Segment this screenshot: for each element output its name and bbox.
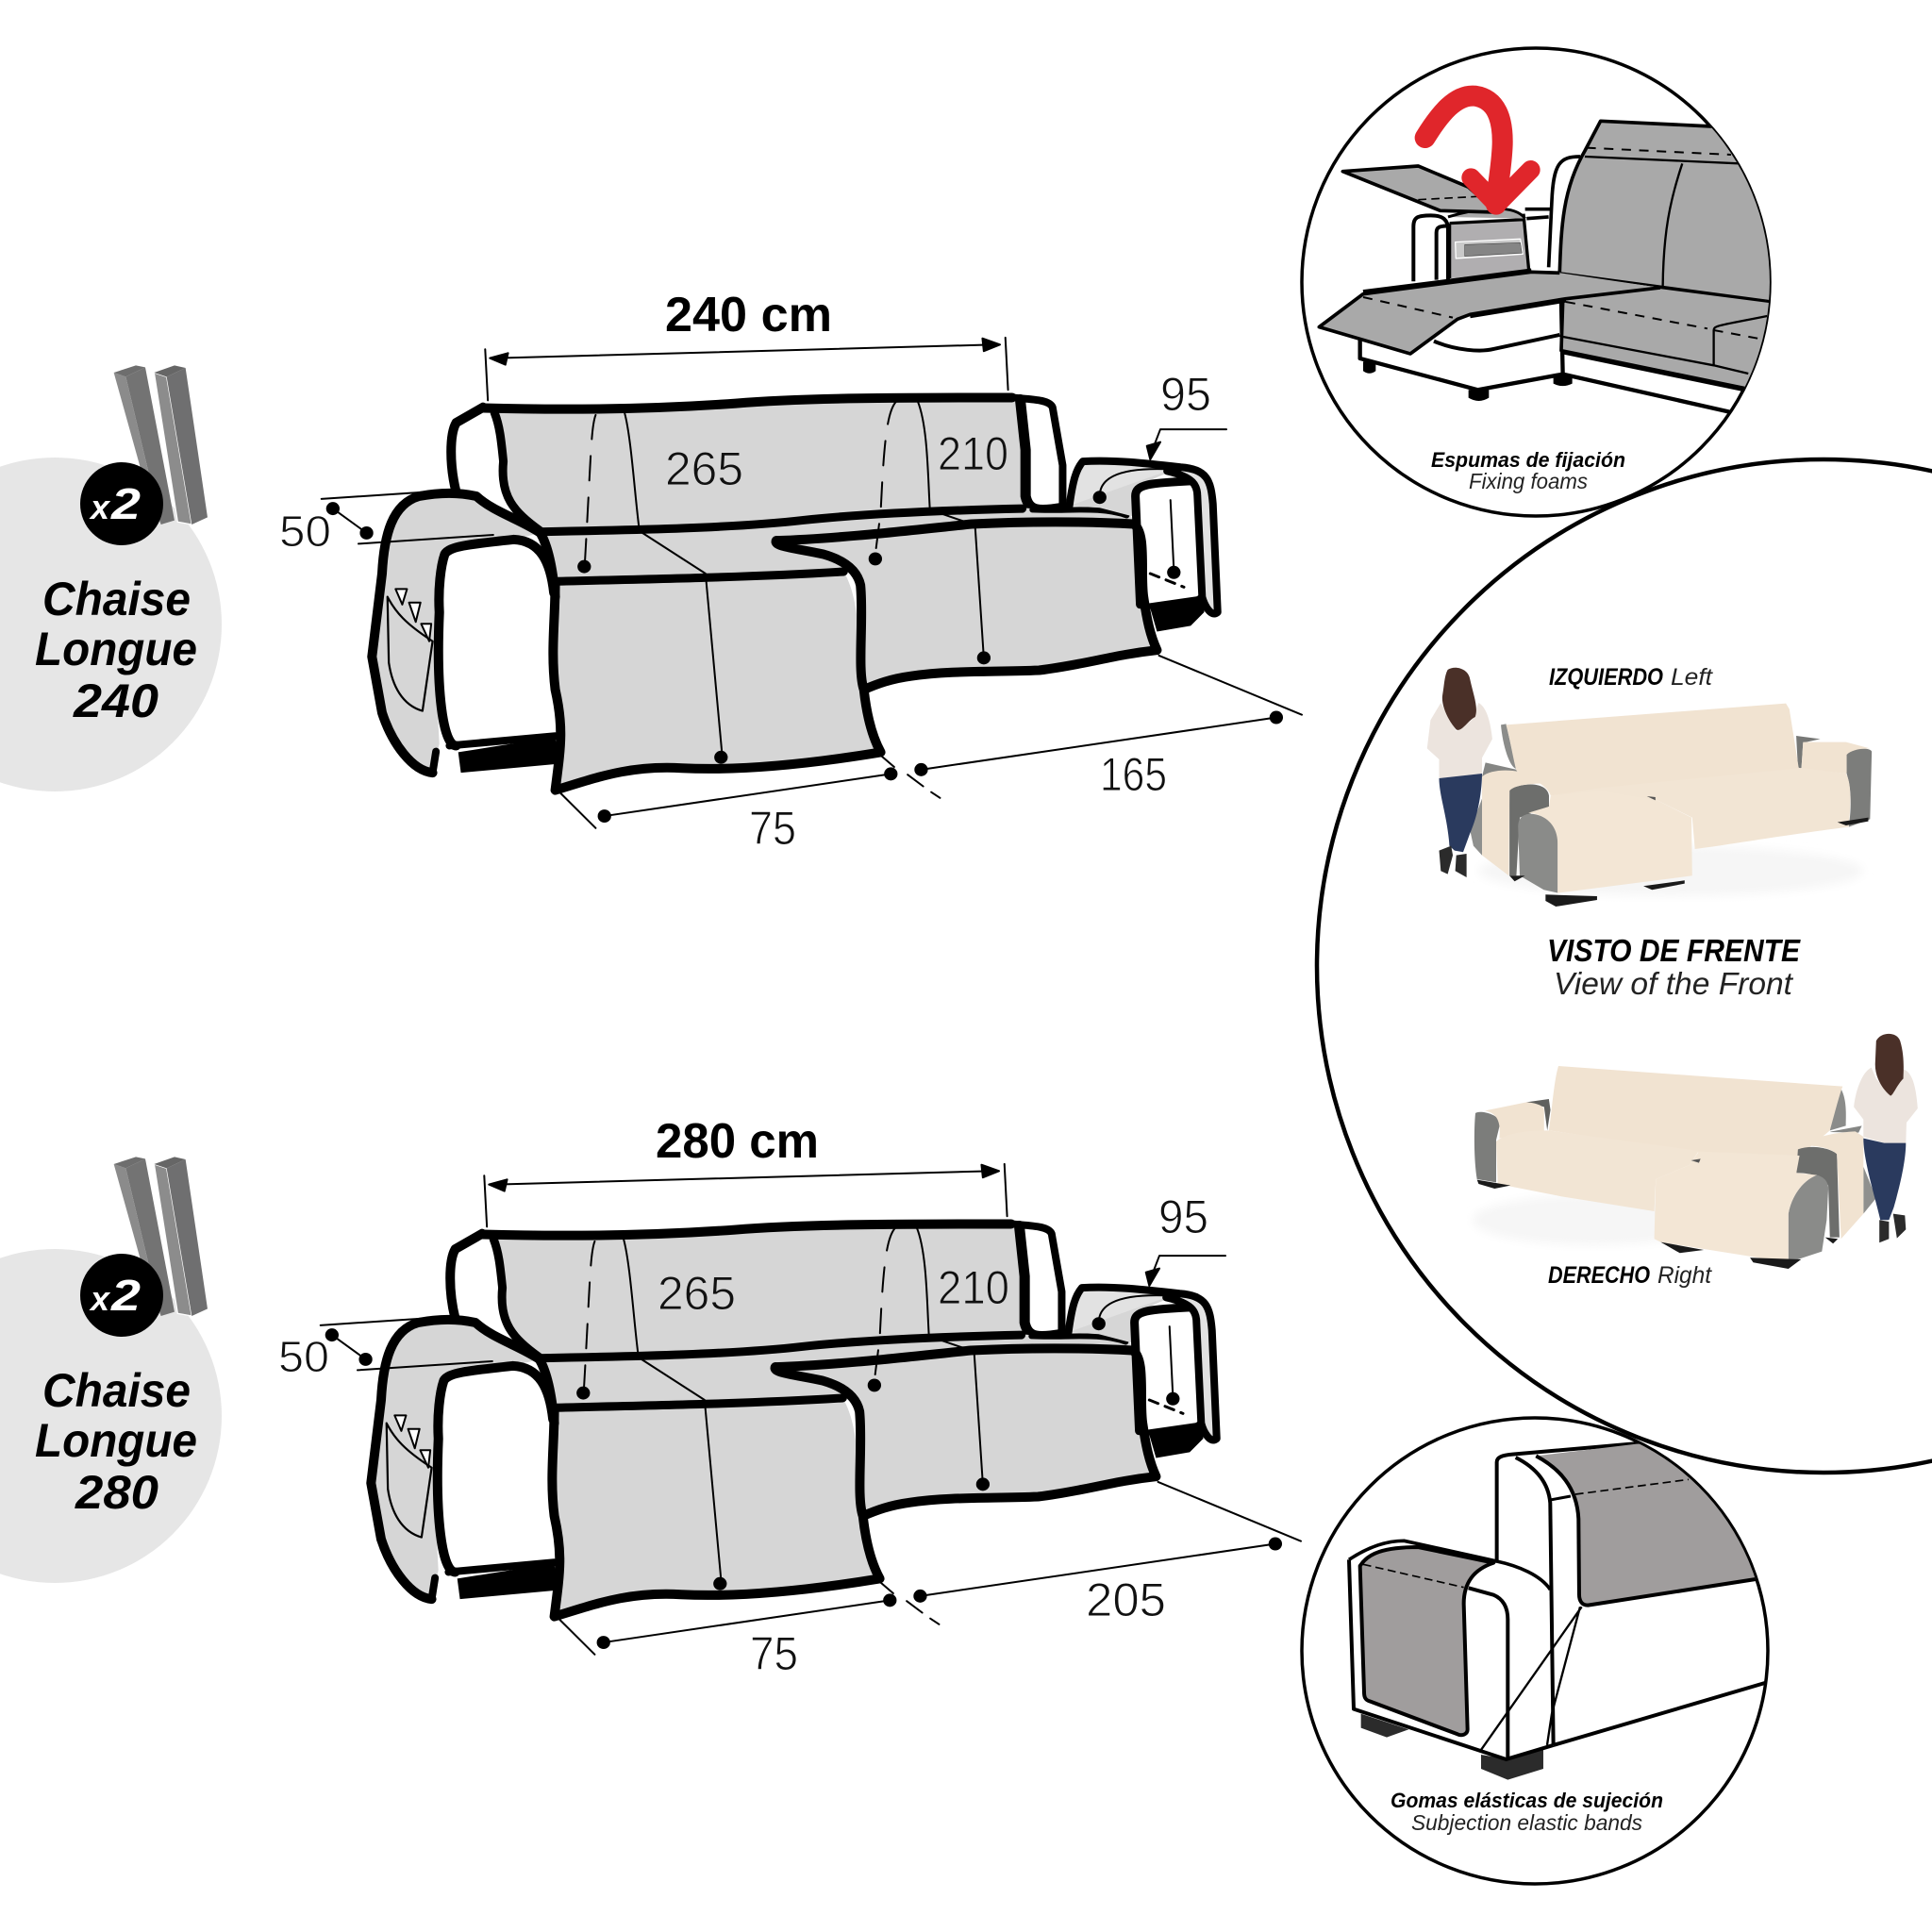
measurements: sofa 280: 265 xyxy=(658,1267,736,1320)
measurements: sofa 280: 280 cm xyxy=(656,1114,819,1169)
measurements: sofa 240: 240 cm xyxy=(665,288,832,342)
photo: right chaise sofa with woman xyxy=(1473,1034,1918,1269)
caption: fixing foams: Fixing foams xyxy=(1469,469,1588,493)
illustration: foam insertion xyxy=(1319,121,1795,412)
back cushion cover xyxy=(451,397,1062,531)
icon: x2 quantity: x xyxy=(89,1279,111,1318)
grey disc xyxy=(0,458,222,791)
measurements: sofa 240: 165 xyxy=(1100,748,1167,801)
panel: view of the front circle xyxy=(1317,459,1932,1473)
measurements: sofa 240: 95 xyxy=(1160,368,1211,421)
left armrest cover with pocket xyxy=(372,493,556,773)
heading: Chaise Longue 240: 240 xyxy=(73,675,158,727)
heading: Chaise Longue 280: 280 xyxy=(75,1466,158,1519)
icon: x2 quantity xyxy=(80,462,163,545)
arrow: red insertion arrow xyxy=(1425,96,1531,205)
icon: x2 quantity xyxy=(80,1254,163,1337)
grey disc xyxy=(0,1249,222,1583)
label: right: Right xyxy=(1657,1262,1712,1289)
icon: foam bars xyxy=(114,1157,208,1316)
right seat cover xyxy=(776,509,1157,690)
photo: left chaise sofa with woman xyxy=(1427,668,1872,907)
heading: view of the front: View of the Front xyxy=(1554,966,1794,1001)
dark plinth bars xyxy=(458,591,1204,773)
diagram: sofa cover 240 xyxy=(322,338,1302,828)
icon: x2 quantity: 2 xyxy=(110,1271,141,1320)
measurements: sofa 240: 210 xyxy=(938,427,1008,480)
panel: chaise longue 280 badge xyxy=(0,1157,222,1583)
heading: view of the front: VISTO DE FRENTE xyxy=(1547,933,1801,968)
measurement lines xyxy=(322,338,1302,828)
panel: chaise longue 240 badge xyxy=(0,365,222,791)
heading: Chaise Longue 240: Longue xyxy=(35,623,197,675)
label: left: Left xyxy=(1671,664,1713,691)
measurements: sofa 280: 75 xyxy=(750,1627,798,1680)
caption: elastic bands xyxy=(1391,1789,1663,1835)
measurements: sofa 280 xyxy=(278,1114,1208,1680)
heading: view of the front xyxy=(1547,933,1801,1001)
measurements: sofa 240: 265 xyxy=(665,442,743,495)
caption: elastic bands: Subjection elastic bands xyxy=(1411,1810,1642,1835)
measurements: sofa 240: 75 xyxy=(749,802,796,855)
diagram: sofa cover 280 xyxy=(321,1164,1301,1655)
icon: foam bars xyxy=(114,365,208,525)
panel: elastic bands detail xyxy=(1302,1418,1795,1884)
measurements: sofa 280: 205 xyxy=(1086,1574,1166,1626)
illustration: armrest with elastic bands xyxy=(1349,1443,1795,1780)
panel: fixing foams detail xyxy=(1302,48,1795,516)
measurement dots xyxy=(326,491,1283,823)
caption: fixing foams xyxy=(1431,448,1625,493)
heading: Chaise Longue 280: Longue xyxy=(35,1414,197,1467)
icon: x2 quantity: x xyxy=(89,488,111,526)
label: right: DERECHO xyxy=(1548,1262,1650,1289)
chaise cover xyxy=(547,537,881,791)
caption: elastic bands: Gomas elásticas de sujeción xyxy=(1391,1789,1663,1812)
measurements: sofa 280: 210 xyxy=(938,1261,1009,1314)
measurements: sofa 240: 50 xyxy=(279,507,331,556)
label: left: IZQUIERDO xyxy=(1549,664,1663,691)
measurements: sofa 280: 95 xyxy=(1158,1191,1208,1243)
heading: Chaise Longue 280: Chaise xyxy=(42,1364,191,1417)
right armrest cover xyxy=(1070,461,1218,613)
seat band behind chaise xyxy=(541,508,1143,581)
icon: x2 quantity: 2 xyxy=(110,479,141,528)
caption: fixing foams: Espumas de fijación xyxy=(1431,448,1625,472)
measurements: sofa 280: 50 xyxy=(278,1332,329,1381)
measurements: sofa 240 xyxy=(279,288,1211,855)
heading: Chaise Longue 240: Chaise xyxy=(42,573,191,625)
